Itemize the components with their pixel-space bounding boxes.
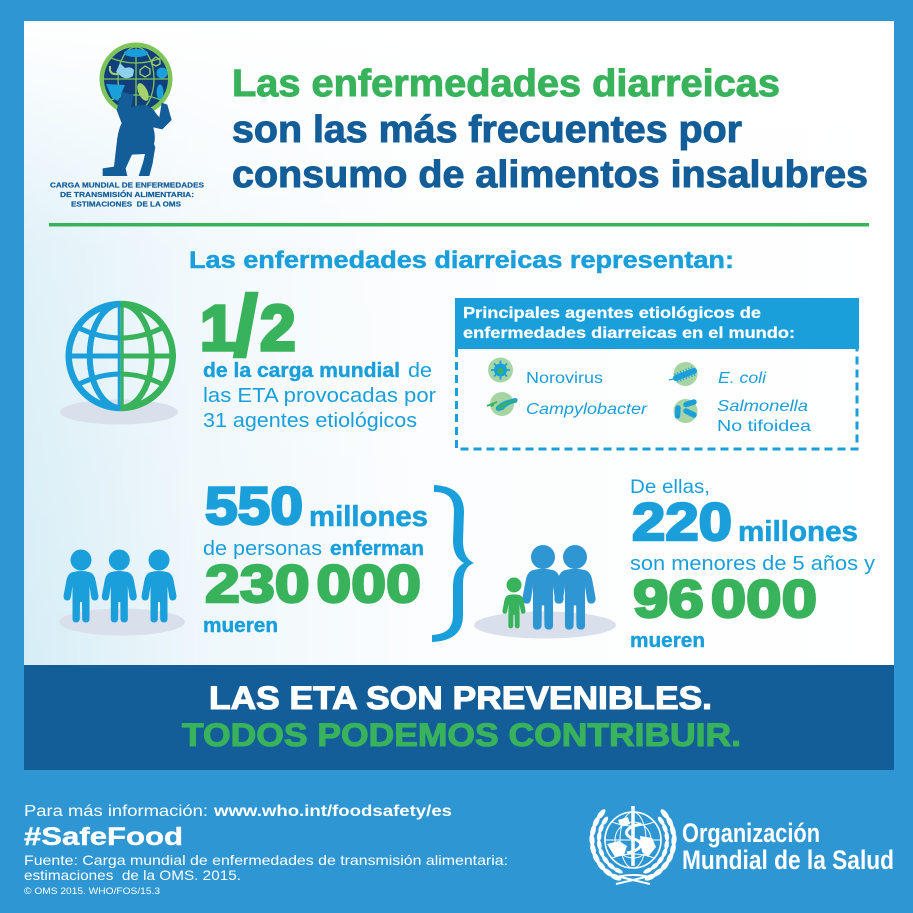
stat: 550 million ill, 230 000 die: de personas bbox=[203, 538, 322, 560]
stat: 220 million under five, 96 000 die: millones bbox=[738, 516, 858, 548]
banner: TODOS PODEMOS CONTRIBUIR. bbox=[182, 717, 741, 753]
stat: 220 million under five, 96 000 die: 96 000 bbox=[633, 570, 817, 629]
logo globe bbox=[100, 42, 172, 116]
stat: 220 million under five, 96 000 die bbox=[630, 476, 875, 652]
panel: principal agents bbox=[455, 298, 859, 449]
WHO emblem bbox=[589, 806, 677, 884]
logo caption: CARGA MUNDIAL DE ENFERMEDADES bbox=[50, 180, 204, 190]
panel dashed frame bbox=[456, 349, 857, 449]
stat: one half of burden: de bbox=[408, 360, 432, 382]
stat: 220 million under five, 96 000 die: mueren bbox=[630, 630, 705, 652]
stat: 550 million ill, 230 000 die: 230 000 bbox=[205, 555, 421, 614]
stat: one half of burden: / bbox=[234, 279, 257, 373]
title: son las más frecuentes por bbox=[232, 109, 742, 151]
stat: 220 million under five, 96 000 die: 220 bbox=[632, 493, 732, 552]
title bbox=[232, 63, 868, 196]
label: salmonella bbox=[717, 398, 811, 435]
footer text: #SafeFood bbox=[24, 823, 183, 851]
stat: 220 million under five, 96 000 die: son menores de 5 años y bbox=[630, 553, 875, 575]
stat: one half of burden bbox=[200, 279, 436, 432]
banner bbox=[24, 665, 894, 770]
logo: atlas carrying globe bbox=[50, 42, 204, 208]
icon: salmonella bbox=[674, 399, 698, 423]
footer text bbox=[24, 803, 508, 897]
footer text: © OMS 2015. WHO/FOS/15.3 bbox=[24, 886, 160, 897]
label: salmonella: No tifoidea bbox=[717, 418, 811, 435]
footer text: estimaciones de la OMS. 2015. bbox=[24, 867, 241, 883]
stat: one half of burden: 2 bbox=[260, 292, 296, 364]
icon: half blue half green globe bbox=[60, 303, 178, 424]
stat: 550 million ill, 230 000 die: enferman bbox=[330, 538, 424, 560]
stat: 550 million ill, 230 000 die: 550 bbox=[205, 477, 303, 536]
footer text: www.who.int/foodsafety/es bbox=[213, 803, 452, 820]
stat: 220 million under five, 96 000 die: De ellas, bbox=[630, 476, 710, 498]
label: norovirus: Norovirus bbox=[526, 370, 603, 387]
logo caption: ESTIMACIONES DE LA OMS bbox=[71, 200, 181, 208]
stat: one half of burden: las ETA provocadas por bbox=[203, 385, 436, 407]
stat: one half of burden: 1 bbox=[200, 292, 236, 364]
panel header: Principales agentes etiológicos de bbox=[463, 305, 761, 322]
logo kneeling figure bbox=[103, 92, 172, 176]
WHO name bbox=[682, 818, 894, 875]
title: Las enfermedades diarreicas bbox=[232, 63, 780, 105]
icon: campylobacter bbox=[487, 392, 517, 416]
label: e. coli: E. coli bbox=[718, 370, 766, 387]
panel header bbox=[455, 298, 859, 349]
icon: three people bbox=[59, 550, 185, 636]
label: salmonella: Salmonella bbox=[717, 398, 808, 415]
banner: LAS ETA SON PREVENIBLES. bbox=[209, 680, 712, 716]
panel header: enfermedades diarreicas en el mundo: bbox=[463, 325, 795, 342]
footer text: Para más información: bbox=[24, 803, 208, 820]
stat: one half of burden: 31 agentes etiológicos bbox=[203, 410, 417, 432]
stat: one half of burden: de la carga mundial bbox=[203, 360, 400, 382]
icon: e. coli bbox=[669, 362, 698, 386]
section heading: Las enfermedades diarreicas representan: bbox=[189, 247, 734, 274]
stat: 550 million ill, 230 000 die bbox=[203, 477, 428, 637]
WHO name: Organización bbox=[682, 818, 820, 848]
logo caption bbox=[50, 180, 204, 208]
icon: norovirus bbox=[488, 358, 513, 382]
icon: two adults and child bbox=[474, 545, 616, 638]
footer text: Fuente: Carga mundial de enfermedades de transmisión alimentaria: bbox=[24, 852, 508, 868]
curly brace bbox=[432, 485, 474, 642]
logo caption: DE TRANSMISIÓN ALIMENTARIA: bbox=[60, 190, 194, 199]
title: consumo de alimentos insalubres bbox=[232, 154, 868, 196]
white content panel bbox=[24, 21, 894, 666]
stat: 550 million ill, 230 000 die: millones bbox=[309, 501, 428, 533]
stat: 550 million ill, 230 000 die: mueren bbox=[203, 615, 278, 637]
label: campylobacter: Campylobacter bbox=[526, 401, 648, 418]
